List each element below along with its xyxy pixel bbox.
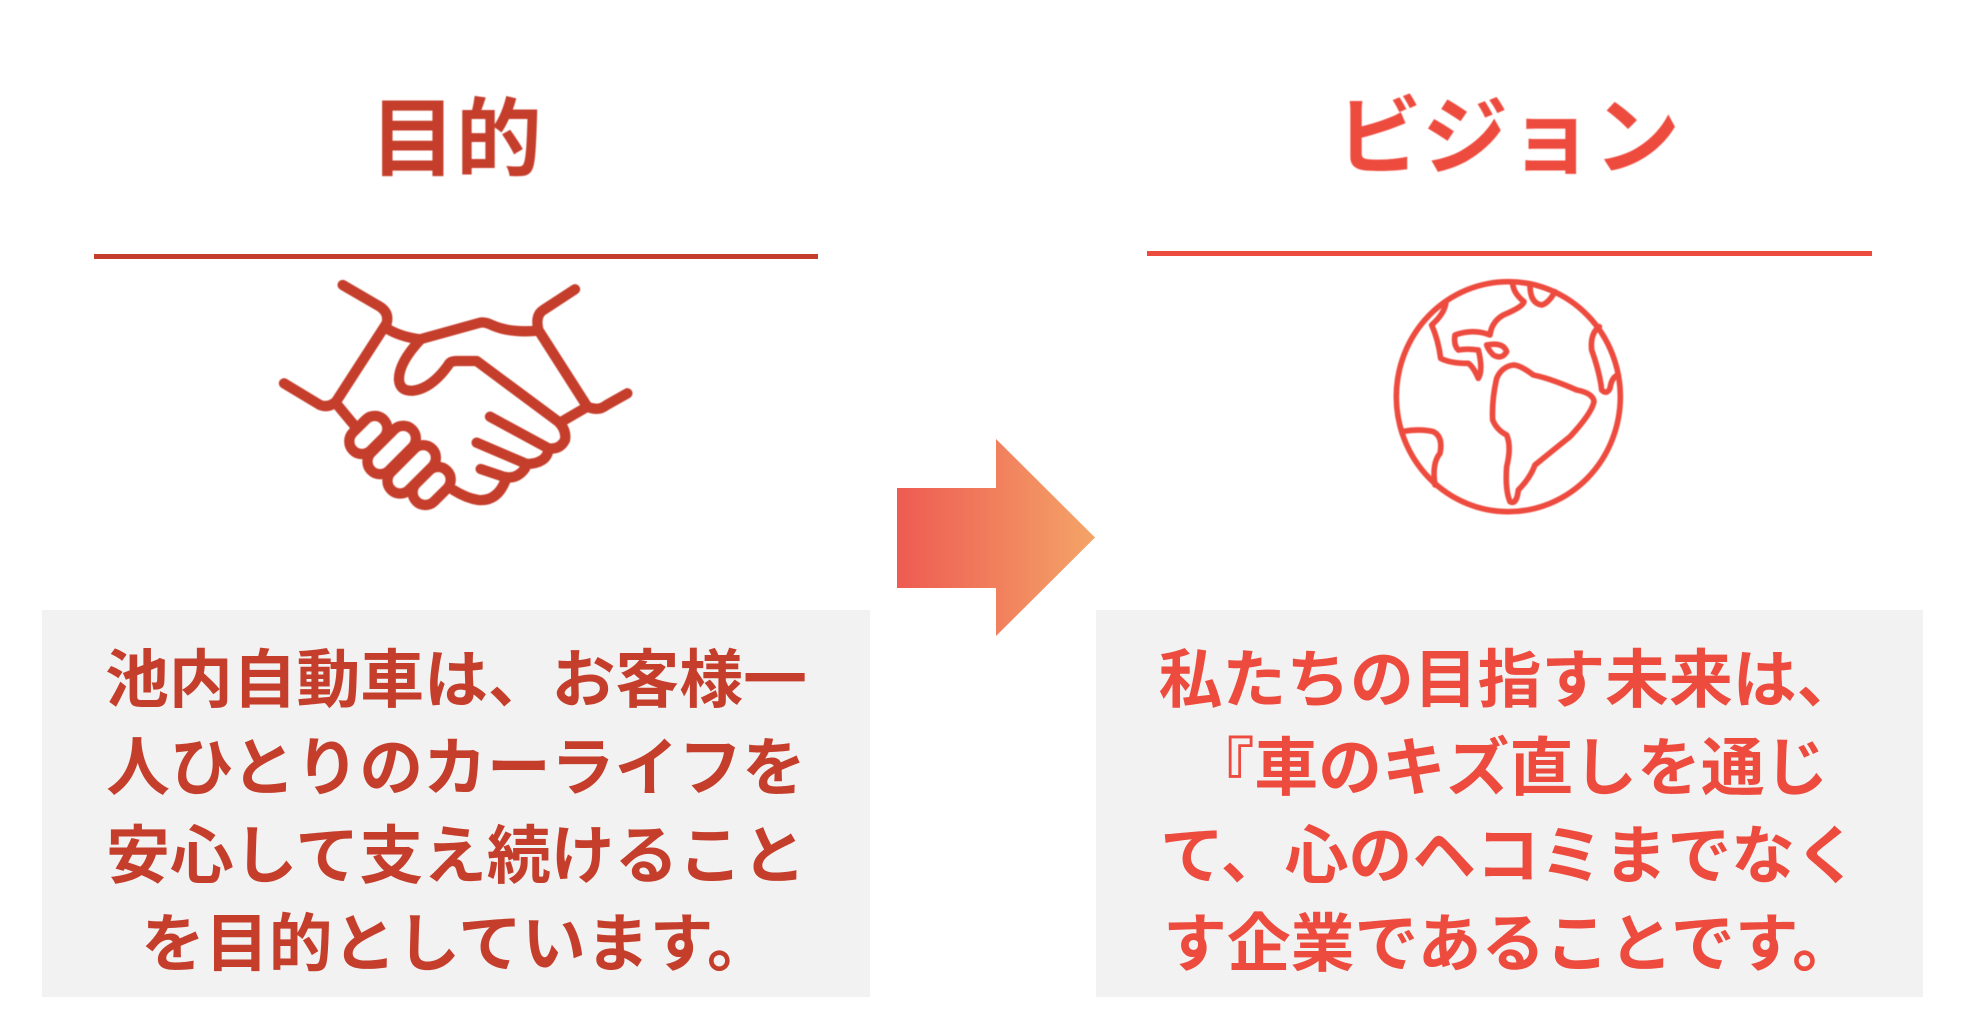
panel: purpose text: 人ひとりのカーライフを — [106, 732, 806, 804]
panel: vision text: て、心のヘコミまでなく — [1160, 820, 1859, 892]
panel: vision text: 私たちの目指す未来は、 — [1159, 644, 1860, 716]
panel: purpose text: 池内自動車は、お客様一 — [105, 644, 807, 716]
heading: ビジョン: ビジョン — [1336, 90, 1680, 186]
heading: 目的: 目的 — [370, 92, 542, 188]
arrow: purpose to vision — [897, 439, 1095, 636]
icon: globe — [1392, 278, 1624, 516]
panel: vision text: 『車のキズ直しを通じ — [1191, 732, 1828, 804]
panel: purpose text: を目的としています。 — [141, 908, 771, 980]
panel: vision text — [1096, 610, 1923, 997]
panel: vision text: す企業であることです。 — [1163, 908, 1856, 980]
panel: purpose text: 安心して支え続けること — [106, 820, 806, 892]
icon: handshake — [278, 279, 634, 511]
panel: purpose text — [42, 610, 870, 997]
